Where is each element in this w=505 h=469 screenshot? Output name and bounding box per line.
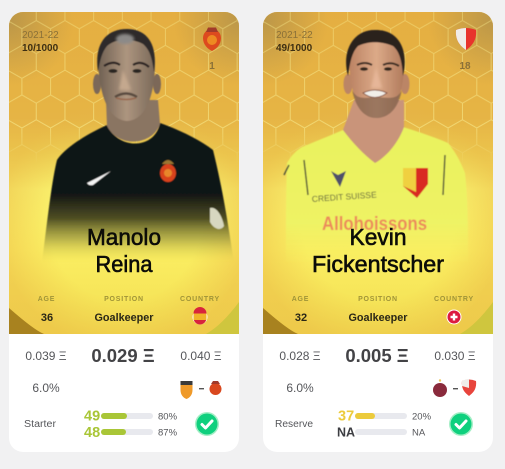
score bars: 48 [84, 425, 100, 441]
sponsor text: CREDIT SUISSE [311, 189, 377, 204]
icon: Switzerland flag [446, 310, 462, 324]
edition: 2021-22 [276, 30, 313, 41]
edition: 10/1000 [22, 43, 59, 54]
position: POSITION [104, 296, 144, 303]
card body [263, 12, 493, 452]
percentage: 6.0% [286, 381, 314, 395]
score bars [337, 408, 432, 440]
player name: Kevin [350, 224, 406, 250]
age: AGE [38, 296, 55, 303]
player name: Fickentscher [312, 251, 444, 277]
age: 32 [295, 312, 307, 324]
jersey crest [403, 168, 428, 198]
country [180, 296, 220, 325]
score bars: 49 [84, 408, 100, 424]
position [94, 296, 154, 324]
age: AGE [292, 296, 309, 303]
player name: Reina [96, 251, 153, 277]
prices: 0.040 Ξ [180, 349, 222, 363]
prices [25, 345, 222, 366]
card image area [263, 12, 493, 334]
country: COUNTRY [434, 296, 474, 303]
player photo [42, 29, 234, 262]
position: POSITION [358, 296, 398, 303]
prices: 0.039 Ξ [25, 349, 67, 363]
player name: Manolo [87, 224, 161, 250]
score bars: NA [412, 428, 426, 438]
score bars [84, 408, 178, 441]
age [38, 296, 55, 324]
icon: check badge [195, 412, 219, 436]
card body [9, 12, 239, 452]
percentage: 6.0% [32, 381, 60, 395]
prices: 0.005 Ξ [345, 345, 409, 366]
status label: Reserve [275, 419, 313, 430]
score bars: 37 [338, 408, 354, 424]
jersey crest [160, 160, 176, 182]
card image area [9, 12, 239, 334]
edition: 2021-22 [22, 30, 59, 41]
prices: 0.029 Ξ [91, 345, 155, 366]
position [348, 296, 408, 324]
position: Goalkeeper [94, 312, 154, 324]
panel: card Kevin Fickentscher [263, 12, 493, 452]
panel: card Manolo Reina [9, 12, 239, 452]
match: club crests [180, 381, 222, 399]
icon: Spain flag [192, 307, 208, 325]
edition: 49/1000 [276, 43, 313, 54]
edition [276, 30, 313, 54]
score bars: 20% [412, 412, 432, 422]
player name [312, 224, 444, 277]
squad number: 18 [459, 61, 471, 72]
icon: club crest [203, 28, 221, 51]
match: club crests [433, 379, 476, 397]
country: COUNTRY [180, 296, 220, 303]
score bars: 80% [158, 412, 178, 422]
age: 36 [41, 312, 53, 324]
position: Goalkeeper [348, 312, 408, 324]
edition [22, 30, 59, 54]
squad number: 1 [209, 61, 215, 72]
prices [279, 345, 476, 366]
icon: club crest [456, 28, 476, 50]
prices: 0.030 Ξ [434, 349, 476, 363]
score bars: 87% [158, 428, 178, 438]
sponsor logo [331, 171, 346, 187]
icon: check badge [449, 412, 473, 436]
age [292, 296, 309, 324]
country [434, 296, 474, 324]
prices: 0.028 Ξ [279, 349, 321, 363]
sponsor name: Allohoissons [322, 214, 427, 235]
player name [87, 224, 161, 277]
status label: Starter [24, 419, 57, 430]
player photo [282, 29, 468, 236]
score bars: NA [337, 426, 355, 440]
